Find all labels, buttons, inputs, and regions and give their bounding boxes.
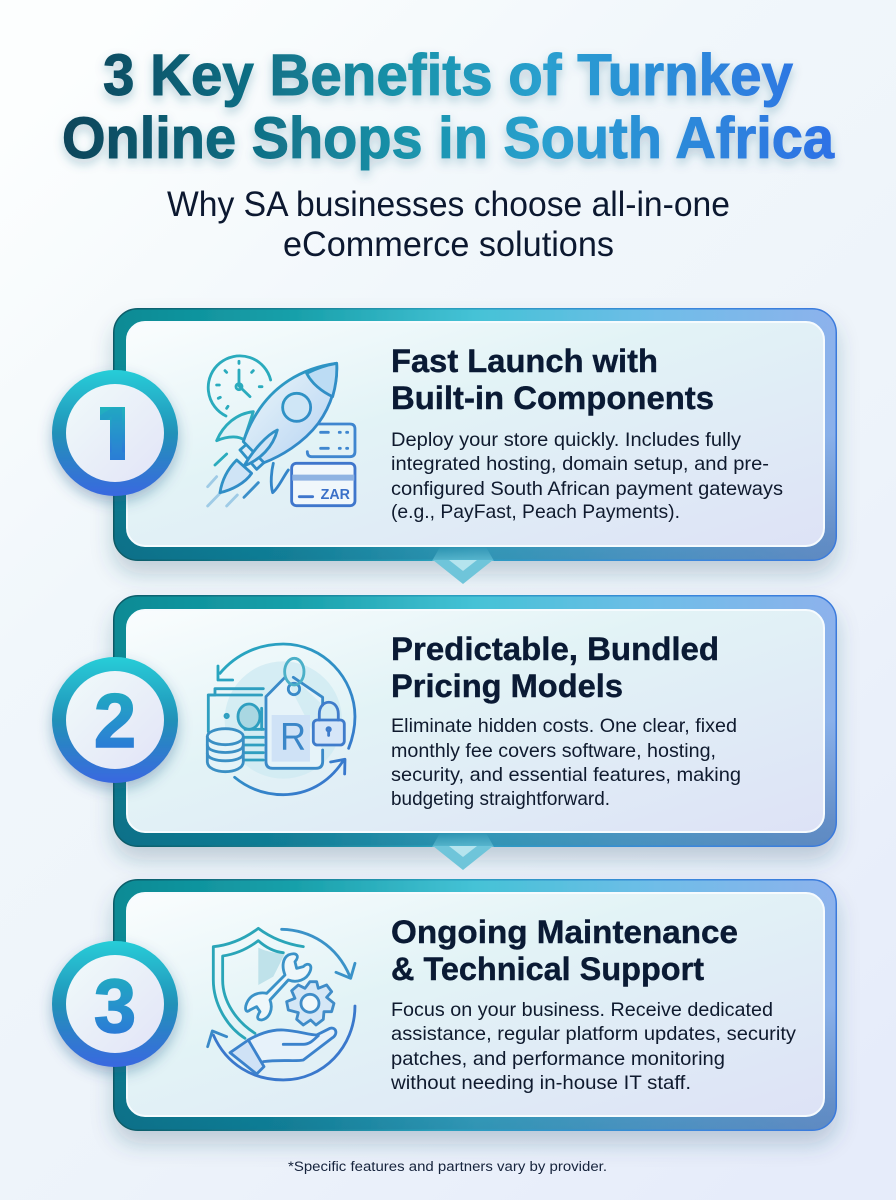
upper fin — [217, 412, 253, 441]
card frame 3 — [114, 880, 836, 1130]
title — [62, 43, 835, 171]
cash — [208, 689, 263, 760]
nozzle — [240, 443, 265, 469]
icon: rocket, clock, server and ZAR card — [208, 356, 355, 506]
motion lines — [215, 454, 227, 465]
card frame 1 — [114, 309, 836, 560]
flame and lower fin — [220, 460, 252, 493]
wrench — [246, 954, 311, 1020]
halo — [225, 661, 342, 779]
number badge 3 — [52, 941, 178, 1067]
subtitle: eCommerce solutions — [283, 225, 614, 264]
number badge 3: 3 — [94, 964, 136, 1049]
panel: benefit 1 — [52, 309, 836, 560]
number badge 2: 2 — [94, 679, 136, 764]
body text 2: monthly fee covers software, hosting, — [391, 740, 716, 762]
body text 2: Eliminate hidden costs. One clear, fixed — [391, 715, 737, 737]
heading 1: Built-in Components — [391, 380, 714, 416]
clock — [208, 356, 271, 416]
tag — [266, 658, 323, 768]
body text 1: integrated hosting, domain setup, and pre- — [391, 453, 769, 475]
connector arrow 1 — [432, 547, 494, 584]
number badge 2 — [52, 657, 178, 783]
icon: price tag, cash, coins and lock: R — [280, 714, 306, 758]
lock — [313, 702, 344, 745]
number badge 1: 1 — [94, 392, 136, 477]
cycle arrows — [220, 644, 355, 748]
body text 3: Focus on your business. Receive dedicated — [391, 999, 773, 1021]
rocket body — [243, 363, 337, 463]
number badge 1 — [52, 370, 178, 496]
hand — [230, 1028, 336, 1074]
coins — [207, 729, 243, 772]
body text 3: patches, and performance monitoring — [391, 1048, 725, 1070]
card frame 2 — [114, 596, 836, 846]
heading 2: Pricing Models — [391, 668, 623, 704]
footnote: *Specific features and partners vary by provider. — [288, 1159, 607, 1174]
body text 3: without needing in-house IT staff. — [390, 1072, 691, 1094]
cycle arrows — [282, 929, 355, 978]
body text 2: security, and essential features, making — [391, 764, 741, 786]
body text 2 — [391, 715, 741, 810]
server — [307, 424, 355, 457]
panel: benefit 3 — [52, 880, 836, 1130]
body text 1 — [391, 429, 783, 523]
body text 3: assistance, regular platform updates, security — [391, 1023, 796, 1045]
heading 2: Predictable, Bundled — [391, 631, 719, 667]
icon: price tag, cash, coins and lock — [207, 644, 355, 795]
panel: benefit 2 — [52, 596, 836, 846]
heading 3: & Technical Support — [391, 951, 704, 987]
gear — [287, 982, 334, 1025]
body text 1: (e.g., PayFast, Peach Payments). — [391, 501, 680, 523]
heading 3 — [391, 914, 738, 987]
subtitle — [167, 185, 730, 264]
subtitle: Why SA businesses choose all-in-one — [167, 185, 730, 224]
icon: rocket, clock, server and ZAR card: ZAR — [321, 487, 350, 503]
payment card — [292, 463, 355, 506]
connector arrow 2 — [432, 833, 494, 870]
title: Online Shops in South Africa — [62, 106, 835, 171]
icon: shield, wrench, gear and hand — [208, 928, 355, 1080]
title: 3 Key Benefits of Turnkey — [103, 43, 793, 108]
heading 2 — [391, 631, 719, 704]
body text 3 — [390, 999, 796, 1094]
heading 3: Ongoing Maintenance — [391, 914, 738, 950]
heading 1 — [391, 343, 714, 416]
body text 1: configured South African payment gateways — [391, 478, 783, 500]
heading 1: Fast Launch with — [391, 343, 658, 379]
body text 2: budgeting straightforward. — [391, 788, 610, 810]
shield — [213, 928, 303, 1038]
body text 1: Deploy your store quickly. Includes fully — [391, 429, 741, 451]
